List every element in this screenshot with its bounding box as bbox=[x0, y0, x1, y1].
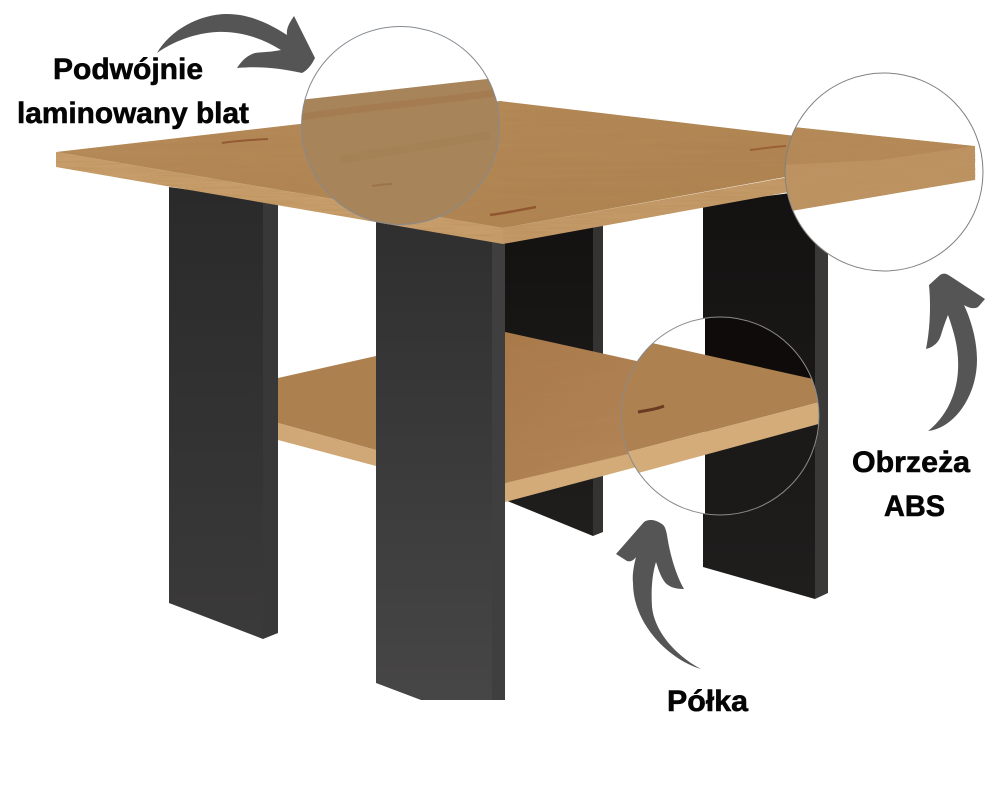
shelf left section bbox=[278, 356, 376, 466]
label: double laminated top: Podwójnie bbox=[53, 53, 203, 86]
back middle leg bbox=[505, 220, 603, 536]
shelf right section bbox=[505, 332, 637, 502]
arrow: to shelf bbox=[616, 520, 701, 669]
label: double laminated top bbox=[17, 53, 249, 130]
label: shelf: Półka bbox=[667, 685, 748, 718]
magnifier: shelf bbox=[620, 316, 822, 516]
label: ABS edging: Obrzeża bbox=[852, 446, 970, 479]
table top bbox=[56, 101, 792, 244]
magnifier: table top bbox=[295, 25, 505, 230]
magnifier: ABS edge bbox=[780, 71, 985, 273]
back right leg bbox=[703, 190, 828, 599]
arrow: to ABS edge bbox=[926, 274, 985, 431]
table top edge bbox=[56, 152, 787, 244]
left leg bbox=[169, 187, 278, 639]
shelf bbox=[278, 332, 637, 502]
arrow: to table top bbox=[157, 14, 315, 73]
label: ABS edging: ABS bbox=[884, 490, 945, 523]
label: ABS edging bbox=[852, 446, 970, 523]
table top surface bbox=[56, 101, 792, 228]
front leg bbox=[376, 222, 505, 700]
label: double laminated top: laminowany blat bbox=[17, 97, 249, 130]
